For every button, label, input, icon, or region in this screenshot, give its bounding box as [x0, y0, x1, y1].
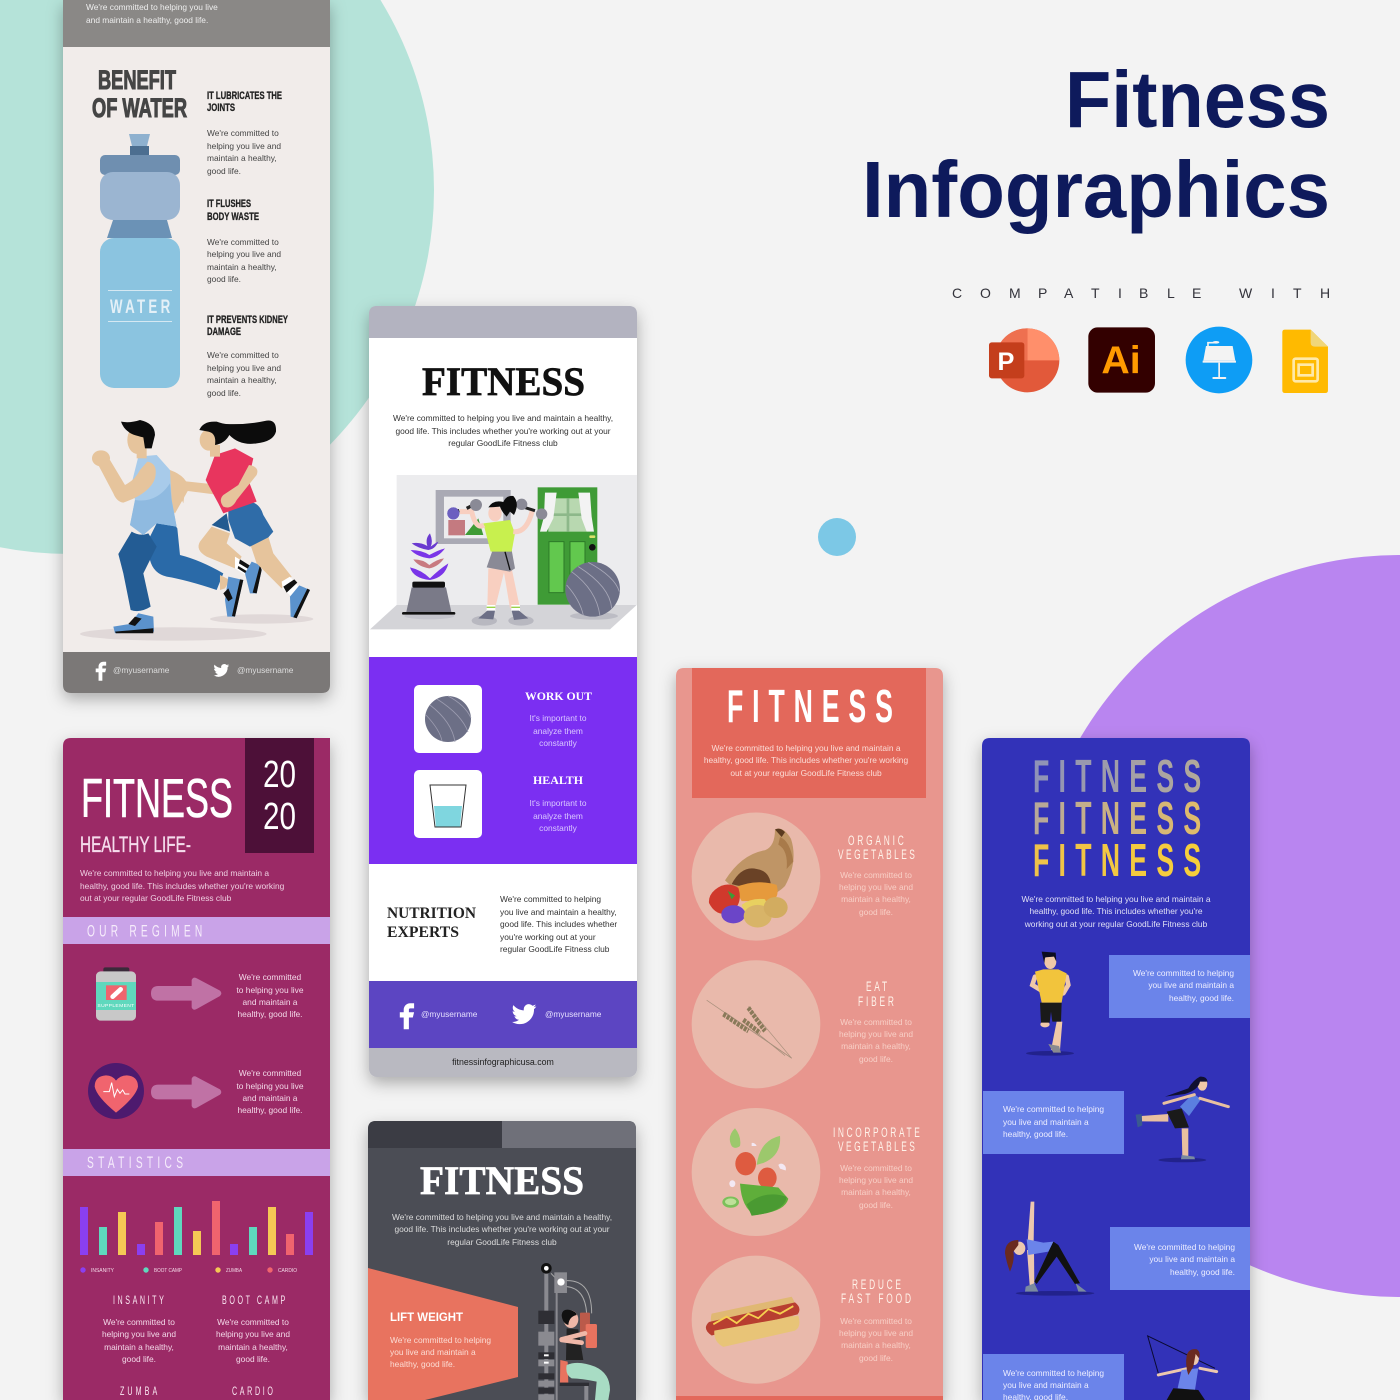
intro text: good life. This includes whether you're working out at your [395, 426, 611, 436]
intro text [392, 1212, 612, 1247]
heading: HEALTHY LIFE- [80, 832, 191, 857]
callout box 1: you live and maintain a [1148, 980, 1234, 990]
benefit 2: good life. [207, 274, 241, 284]
section: nutrition experts: EXPERTS [387, 924, 459, 941]
intro text [80, 868, 285, 903]
section: nutrition experts: NUTRITION [387, 905, 476, 922]
text: organic vegetables [838, 834, 915, 917]
text: reduce fast food: We're committed to [840, 1316, 912, 1326]
section: nutrition experts [369, 864, 637, 981]
band: our regimen: OUR REGIMEN [87, 921, 202, 940]
text: eat fiber: FIBER [858, 995, 894, 1010]
regimen text 1: healthy, good life. [237, 1009, 303, 1019]
panel: fitness work out [369, 306, 637, 1077]
intro text: working out at your regular GoodLife Fitness club [1024, 919, 1208, 929]
regimen text 1: and maintain a [243, 997, 298, 1007]
chart legend: BOOT CAMP [154, 1268, 182, 1274]
benefit 2: We're committed to [207, 237, 279, 247]
chart legend: ZUMBA [226, 1268, 242, 1274]
intro text: We're committed to helping you live and maintain a [80, 868, 269, 878]
year box [245, 738, 314, 853]
benefit 2 [207, 198, 281, 284]
header box [692, 668, 926, 798]
stat: insanity [102, 1294, 176, 1364]
text: work out: constantly [539, 738, 578, 748]
website: fitnessinfographicusa.com [452, 1057, 554, 1067]
heading: FITNESS [420, 1158, 584, 1203]
text: work out [525, 689, 592, 748]
figure: runner [1026, 952, 1074, 1056]
text: work out: analyze them [533, 726, 583, 736]
panel: fitness 2020 [63, 738, 330, 1400]
bar chart [80, 1201, 313, 1255]
text: reduce fast food: good life. [859, 1353, 893, 1363]
icon: heart rate [88, 1063, 144, 1119]
section: nutrition experts: you're working out at your [500, 932, 596, 942]
callout box 2: healthy, good life. [1003, 1129, 1068, 1139]
social bar: @myusername [421, 1009, 478, 1019]
heading: FITNESS [81, 767, 233, 829]
panel: benefit of water [63, 0, 330, 693]
text: incorporate vegetables: helping you live and [839, 1175, 913, 1185]
year box: 20 [263, 796, 296, 838]
callout box 2: you live and maintain a [1003, 1117, 1089, 1127]
text: organic vegetables: maintain a healthy, [841, 894, 911, 904]
text: organic vegetables: helping you live and [839, 882, 913, 892]
regimen text 1: We're committed [239, 972, 302, 982]
text: work out: WORK OUT [525, 689, 592, 703]
stat: boot camp: good life. [236, 1354, 270, 1364]
icon: Illustrator [1088, 327, 1155, 393]
social bar [369, 981, 637, 1048]
benefit 1: JOINTS [207, 102, 235, 114]
heading: benefit of water: BENEFIT [98, 65, 176, 95]
text: reduce fast food: helping you live and [839, 1328, 913, 1338]
title: Infographics [862, 145, 1330, 234]
heading: benefit of water [92, 65, 187, 123]
icon: salad [692, 1108, 820, 1236]
callout box 3: healthy, good life. [1170, 1267, 1235, 1277]
figure: resistance band [1148, 1336, 1217, 1400]
intro text: healthy, good life. This includes whether you're working [80, 881, 285, 891]
section: purple tips [369, 657, 637, 864]
benefit 1: We're committed to [207, 128, 279, 138]
header box: FITNESS [727, 680, 893, 732]
regimen text 1 [236, 972, 304, 1019]
intro text: We're committed to helping you live and maintain a [1021, 894, 1211, 904]
regimen text 2 [236, 1068, 304, 1115]
text: incorporate vegetables: maintain a healthy, [841, 1187, 911, 1197]
text: organic vegetables: We're committed to [840, 870, 912, 880]
heading: FITNESS [422, 359, 585, 404]
panel footer: @myusername [237, 665, 294, 675]
heading: repeated fitness: FITNESS [1033, 750, 1201, 802]
icon: Keynote [1186, 327, 1252, 393]
panel: fitness lift weight [368, 1121, 636, 1400]
figure: balance pose [1136, 1077, 1228, 1162]
compatible with label: COMPATIBLE [952, 285, 1201, 301]
stat: insanity: INSANITY [113, 1294, 164, 1308]
benefit 3: good life. [207, 388, 241, 398]
panel header: We're committed to helping you live [86, 2, 218, 12]
regimen text 2: and maintain a [243, 1093, 298, 1103]
band: statistics: STATISTICS [87, 1152, 183, 1172]
text: eat fiber: We're committed to [840, 1017, 912, 1027]
icon: Google Slides [1282, 330, 1328, 393]
social bar: @myusername [545, 1009, 602, 1019]
text: eat fiber: maintain a healthy, [841, 1041, 911, 1051]
benefit 2: IT FLUSHES [207, 198, 251, 210]
callout box 3 [1110, 1227, 1250, 1290]
callout: lift weight: LIFT WEIGHT [390, 1310, 464, 1324]
text: incorporate vegetables: We're committed to [840, 1163, 912, 1173]
year box: 20 [263, 754, 296, 796]
benefit 3: We're committed to [207, 350, 279, 360]
icon: water bottle: WATER [110, 297, 170, 318]
regimen text 1: to helping you live [236, 985, 304, 995]
section: nutrition experts: good life. This includes whether [500, 919, 617, 929]
callout box 1: We're committed to helping [1133, 968, 1234, 978]
regimen text 2: We're committed [239, 1068, 302, 1078]
icon: cornucopia [692, 813, 820, 941]
callout: lift weight: healthy, good life. [390, 1359, 455, 1369]
callout: lift weight [368, 1268, 518, 1400]
heading: repeated fitness: FITNESS [1033, 834, 1201, 886]
callout box 2 [983, 1091, 1124, 1154]
benefit 2: BODY WASTE [207, 211, 259, 223]
section: nutrition experts: We're committed to helping [500, 894, 601, 904]
stat: boot camp [216, 1294, 290, 1364]
intro text: good life. This includes whether you're working out at your [394, 1224, 610, 1234]
text: incorporate vegetables: INCORPORATE [833, 1126, 920, 1141]
icon card: water glass [414, 770, 482, 838]
text: eat fiber: helping you live and [839, 1029, 913, 1039]
icon: hot dog [692, 1256, 820, 1384]
heading: repeated fitness: FITNESS [1033, 792, 1201, 844]
benefit 2: helping you live and [207, 249, 281, 259]
callout: lift weight: you live and maintain a [390, 1347, 476, 1357]
panel: fitness food [676, 668, 943, 1400]
title: Fitness [1065, 55, 1330, 144]
text: reduce fast food [839, 1278, 913, 1363]
text: reduce fast food: REDUCE [852, 1278, 901, 1293]
stat: insanity: maintain a healthy, [104, 1342, 174, 1352]
callout box 4: you live and maintain a [1003, 1380, 1089, 1390]
text: organic vegetables: ORGANIC [848, 834, 904, 849]
band: statistics [63, 1149, 330, 1176]
heading: benefit of water: OF WATER [92, 93, 187, 123]
intro text: We're committed to helping you live and maintain a healthy, [393, 413, 613, 423]
regimen text 2: healthy, good life. [237, 1105, 303, 1115]
text: incorporate vegetables [833, 1126, 920, 1210]
illustration: runners [80, 420, 313, 641]
stat: insanity: good life. [122, 1354, 156, 1364]
icon: supplement jar [96, 967, 136, 1021]
stat: zumba: ZUMBA [120, 1385, 158, 1399]
panel header [63, 0, 330, 47]
intro text [393, 413, 613, 448]
callout box 1 [1109, 955, 1250, 1018]
chart legend [80, 1267, 298, 1274]
icon: wheat [692, 960, 820, 1088]
arrow [151, 1076, 221, 1108]
callout: lift weight: We're committed to helping [390, 1335, 491, 1345]
text: reduce fast food: maintain a healthy, [841, 1340, 911, 1350]
arrow [151, 978, 221, 1010]
benefit 1: IT LUBRICATES THE [207, 90, 282, 102]
stat: insanity: helping you live and [102, 1329, 176, 1339]
compatible with label: WITH [1239, 285, 1330, 301]
text: eat fiber: EAT [866, 980, 887, 995]
text: health: HEALTH [533, 773, 584, 787]
title [862, 55, 1330, 234]
benefit 3: maintain a healthy, [207, 375, 277, 385]
text: health: analyze them [533, 811, 583, 821]
text: incorporate vegetables: good life. [859, 1200, 893, 1210]
benefit 1: good life. [207, 166, 241, 176]
callout box 2: We're committed to helping [1003, 1104, 1104, 1114]
icon: twitter [214, 664, 229, 677]
intro text: We're committed to helping you live and maintain a healthy, [392, 1212, 612, 1222]
text: incorporate vegetables: VEGETABLES [838, 1140, 915, 1155]
stat: insanity: We're committed to [103, 1317, 175, 1327]
chart legend: INSANITY [91, 1268, 114, 1274]
text: health: It's important to [530, 798, 587, 808]
illustration: home workout [370, 475, 637, 629]
intro text [1021, 894, 1211, 929]
callout box 4: We're committed to helping [1003, 1368, 1104, 1378]
icon: water bottle [100, 134, 180, 388]
panel header: and maintain a healthy, good life. [86, 15, 208, 25]
panel: fitness exercises [982, 738, 1250, 1400]
icon: Illustrator: Ai [1101, 338, 1141, 382]
section: nutrition experts: regular GoodLife Fitness club [500, 944, 610, 954]
text: eat fiber: good life. [859, 1054, 893, 1064]
illustration: weight machine [538, 1263, 610, 1400]
stat: boot camp: We're committed to [217, 1317, 289, 1327]
callout box 3: We're committed to helping [1134, 1242, 1235, 1252]
text: organic vegetables: VEGETABLES [838, 848, 915, 863]
heading [80, 767, 233, 857]
icon: supplement jar: SUPPLEMENT [97, 1003, 135, 1009]
icon: PowerPoint [989, 328, 1059, 392]
stat: boot camp: BOOT CAMP [222, 1294, 285, 1308]
icon: facebook [96, 662, 106, 681]
band: our regimen [63, 917, 330, 944]
text: health: constantly [539, 823, 578, 833]
chart legend: CARDIO [278, 1268, 298, 1274]
text: reduce fast food: FAST FOOD [841, 1292, 911, 1307]
text: organic vegetables: good life. [859, 907, 893, 917]
heading: repeated fitness [1033, 750, 1201, 886]
benefit 1: helping you live and [207, 141, 281, 151]
text: work out: It's important to [530, 713, 587, 723]
regimen text 2: to helping you live [236, 1081, 304, 1091]
intro text: regular GoodLife Fitness club [447, 1237, 557, 1247]
intro text: regular GoodLife Fitness club [448, 438, 558, 448]
panel footer [63, 652, 330, 693]
benefit 2: maintain a healthy, [207, 262, 277, 272]
benefit 1 [207, 90, 282, 176]
callout box 4 [983, 1354, 1124, 1400]
header box: out at your regular GoodLife Fitness club [730, 768, 882, 778]
header box: We're committed to helping you live and maintain a [711, 743, 901, 753]
callout box 1: healthy, good life. [1169, 993, 1234, 1003]
text: health [530, 773, 587, 833]
benefit 3: IT PREVENTS KIDNEY [207, 314, 288, 326]
icon: PowerPoint: P [998, 348, 1015, 376]
icon card: gym ball [414, 685, 482, 753]
stat: boot camp: helping you live and [216, 1329, 290, 1339]
intro text: healthy, good life. This includes whether you're [1029, 906, 1203, 916]
benefit 3 [207, 314, 288, 398]
stat: cardio: CARDIO [232, 1385, 273, 1399]
callout box 3: you live and maintain a [1149, 1254, 1235, 1264]
text: eat fiber [839, 980, 913, 1064]
benefit 3: DAMAGE [207, 326, 241, 338]
section: nutrition experts: you live and maintain a healthy, [500, 907, 617, 917]
header box: healthy, good life. This includes whether you're working [704, 755, 908, 765]
stat: boot camp: maintain a healthy, [218, 1342, 288, 1352]
figure: triangle pose [1005, 1202, 1094, 1296]
benefit 1: maintain a healthy, [207, 153, 277, 163]
panel footer: @myusername [113, 665, 170, 675]
intro text: out at your regular GoodLife Fitness club [80, 893, 232, 903]
benefit 3: helping you live and [207, 363, 281, 373]
